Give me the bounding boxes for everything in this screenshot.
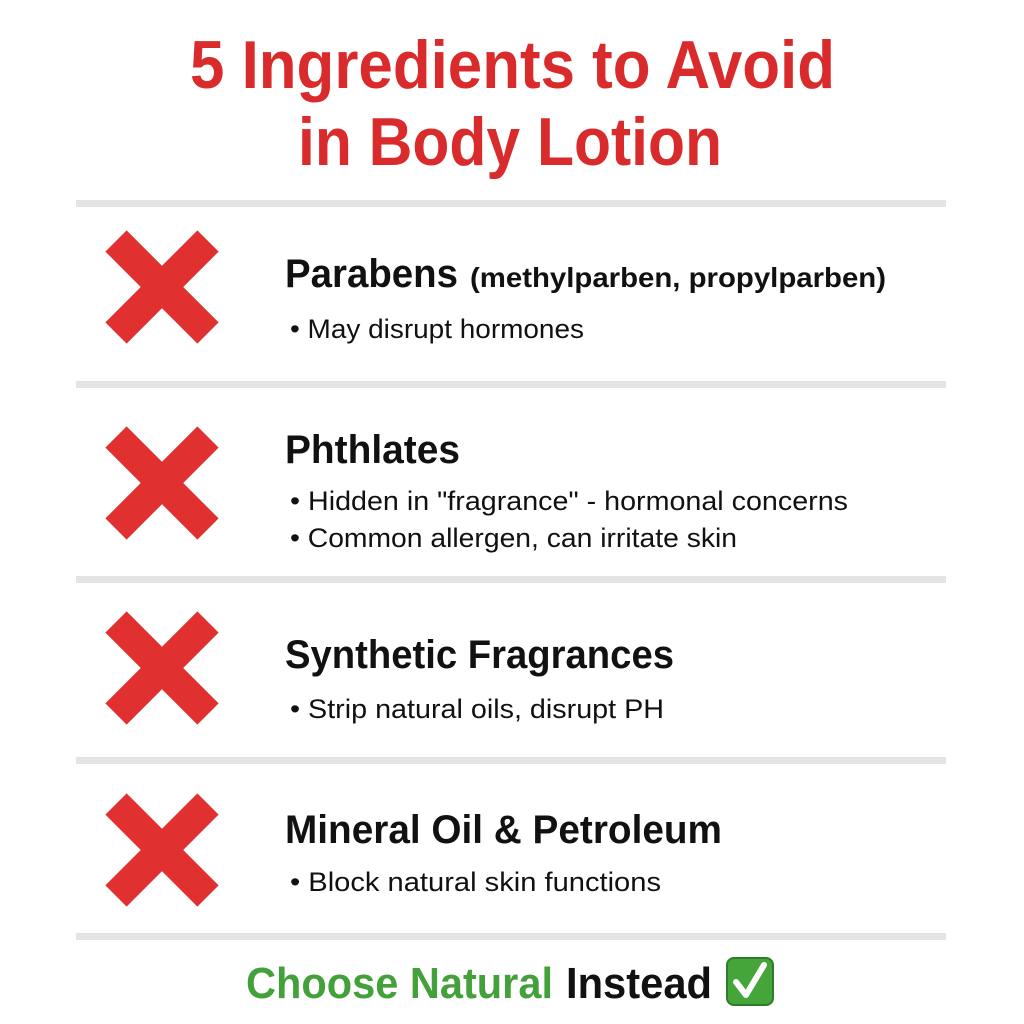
footer: Instead [566, 959, 712, 1008]
bullet: • May disrupt hormones [290, 314, 584, 344]
subheading: (methylparben, propylparben) [470, 262, 886, 293]
icon: check [727, 958, 773, 1005]
icon: red x [116, 437, 208, 529]
panel: mineral oil [116, 804, 722, 897]
title: in Body Lotion [298, 104, 722, 180]
panel: phthlates [116, 428, 848, 553]
bullet: • Block natural skin functions [290, 867, 661, 897]
footer [246, 958, 773, 1008]
heading: synthetic fragrances: Synthetic Fragrances [285, 633, 674, 677]
bullets [290, 486, 848, 553]
footer: Choose Natural [246, 959, 553, 1008]
title [190, 27, 835, 180]
heading: parabens: Parabens [285, 252, 458, 296]
icon: red x [116, 804, 208, 896]
title: 5 Ingredients to Avoid [190, 27, 835, 103]
bullets: • Common allergen, can irritate skin [290, 523, 737, 553]
heading: phthlates: Phthlates [285, 428, 460, 472]
icon: red x [116, 241, 208, 333]
icon: red x [116, 622, 208, 714]
panel: synthetic fragrances [116, 622, 674, 724]
heading: mineral oil: Mineral Oil & Petroleum [285, 808, 722, 852]
panel: parabens [116, 241, 886, 344]
bullet: • Strip natural oils, disrupt PH [290, 694, 664, 724]
bullets: • Hidden in "fragrance" - hormonal concerns [290, 486, 848, 516]
